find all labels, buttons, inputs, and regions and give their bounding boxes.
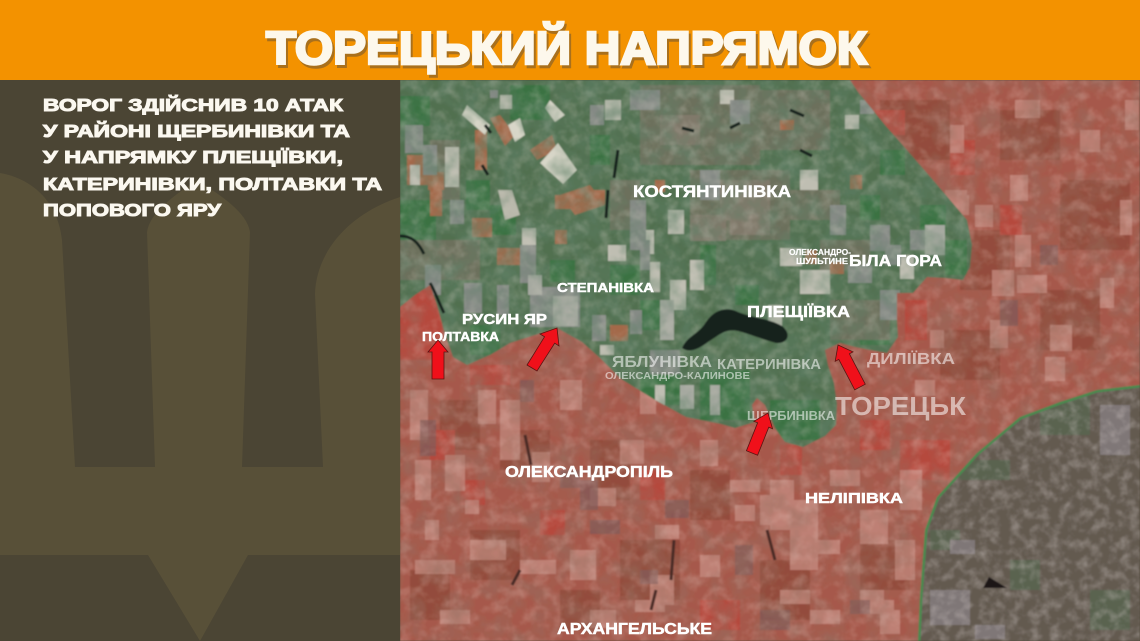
arrow: Щербинівка (746, 413, 772, 455)
place labels: occupied, faded: ДИЛІЇВКА (867, 350, 956, 368)
pale and white fields (410, 90, 914, 414)
left text block (43, 94, 382, 220)
place labels: bright: СТЕПАНІВКА (557, 280, 655, 295)
arrow: Полтавка (428, 340, 448, 379)
lake (682, 309, 788, 350)
title: ТОРЕЦЬКИЙ НАПРЯМОК (266, 22, 868, 74)
place labels: bright: ПОЛТАВКА (422, 329, 500, 344)
streams in red area (512, 435, 775, 610)
ground mottling, green (400, 80, 972, 443)
place labels: occupied, faded: ОЛЕКСАНДРО-КАЛИНОВЕ (605, 370, 750, 382)
ground mottling, red (400, 80, 1140, 641)
streams (400, 110, 812, 313)
left text block: ПОПОВОГО ЯРУ (43, 200, 222, 220)
place labels: bright: БІЛА ГОРА (849, 253, 942, 270)
brown fields (407, 120, 862, 341)
place labels: bright: ОЛЕКСАНДРОПІЛЬ (505, 464, 673, 481)
left text block: КАТЕРИНІВКИ, ПОЛТАВКИ ТА (43, 174, 382, 194)
place labels: bright: ПЛЕЩІЇВКА (747, 304, 850, 321)
place labels: occupied, faded: ТОРЕЦЬК (835, 391, 966, 421)
trident emblem (0, 173, 400, 641)
arrow: Плещіївка (835, 345, 865, 390)
place labels: occupied, faded: КАТЕРИНІВКА (717, 357, 822, 373)
map: satellite base (400, 80, 1140, 641)
controlled territory (green) (400, 80, 972, 448)
left text block: У РАЙОНІ ЩЕРБИНІВКИ ТА (43, 120, 350, 141)
occupied territory (red) (400, 80, 1140, 641)
arrow: Русин Яр (527, 328, 559, 371)
place labels: bright: РУСИН ЯР (462, 312, 547, 328)
place labels: bright: ШУЛЬТИНЕ (796, 256, 848, 266)
place labels: occupied, faded: ЯБЛУНІВКА (612, 354, 712, 371)
place labels: bright: АРХАНГЕЛЬСЬКЕ (557, 621, 712, 638)
separatist/gray territory (900, 380, 1140, 641)
gray fields (405, 90, 940, 374)
left text block: У НАПРЯМКУ ПЛЕЩІЇВКИ, (43, 147, 343, 167)
place labels: occupied, faded (605, 350, 966, 423)
left panel (0, 80, 400, 641)
ground mottling, gray (920, 389, 1140, 641)
place labels: bright (422, 183, 942, 638)
left text block: ВОРОГ ЗДІЙСНИВ 10 АТАК (43, 94, 343, 115)
place labels: bright: КОСТЯНТИНІВКА (633, 183, 791, 201)
place labels: occupied, faded: ЩЕРБИНІВКА (747, 408, 836, 423)
place labels: bright: ОЛЕКСАНДРО- (789, 247, 851, 257)
place labels: bright: НЕЛІПІВКА (805, 491, 904, 507)
header bar (0, 0, 1140, 80)
